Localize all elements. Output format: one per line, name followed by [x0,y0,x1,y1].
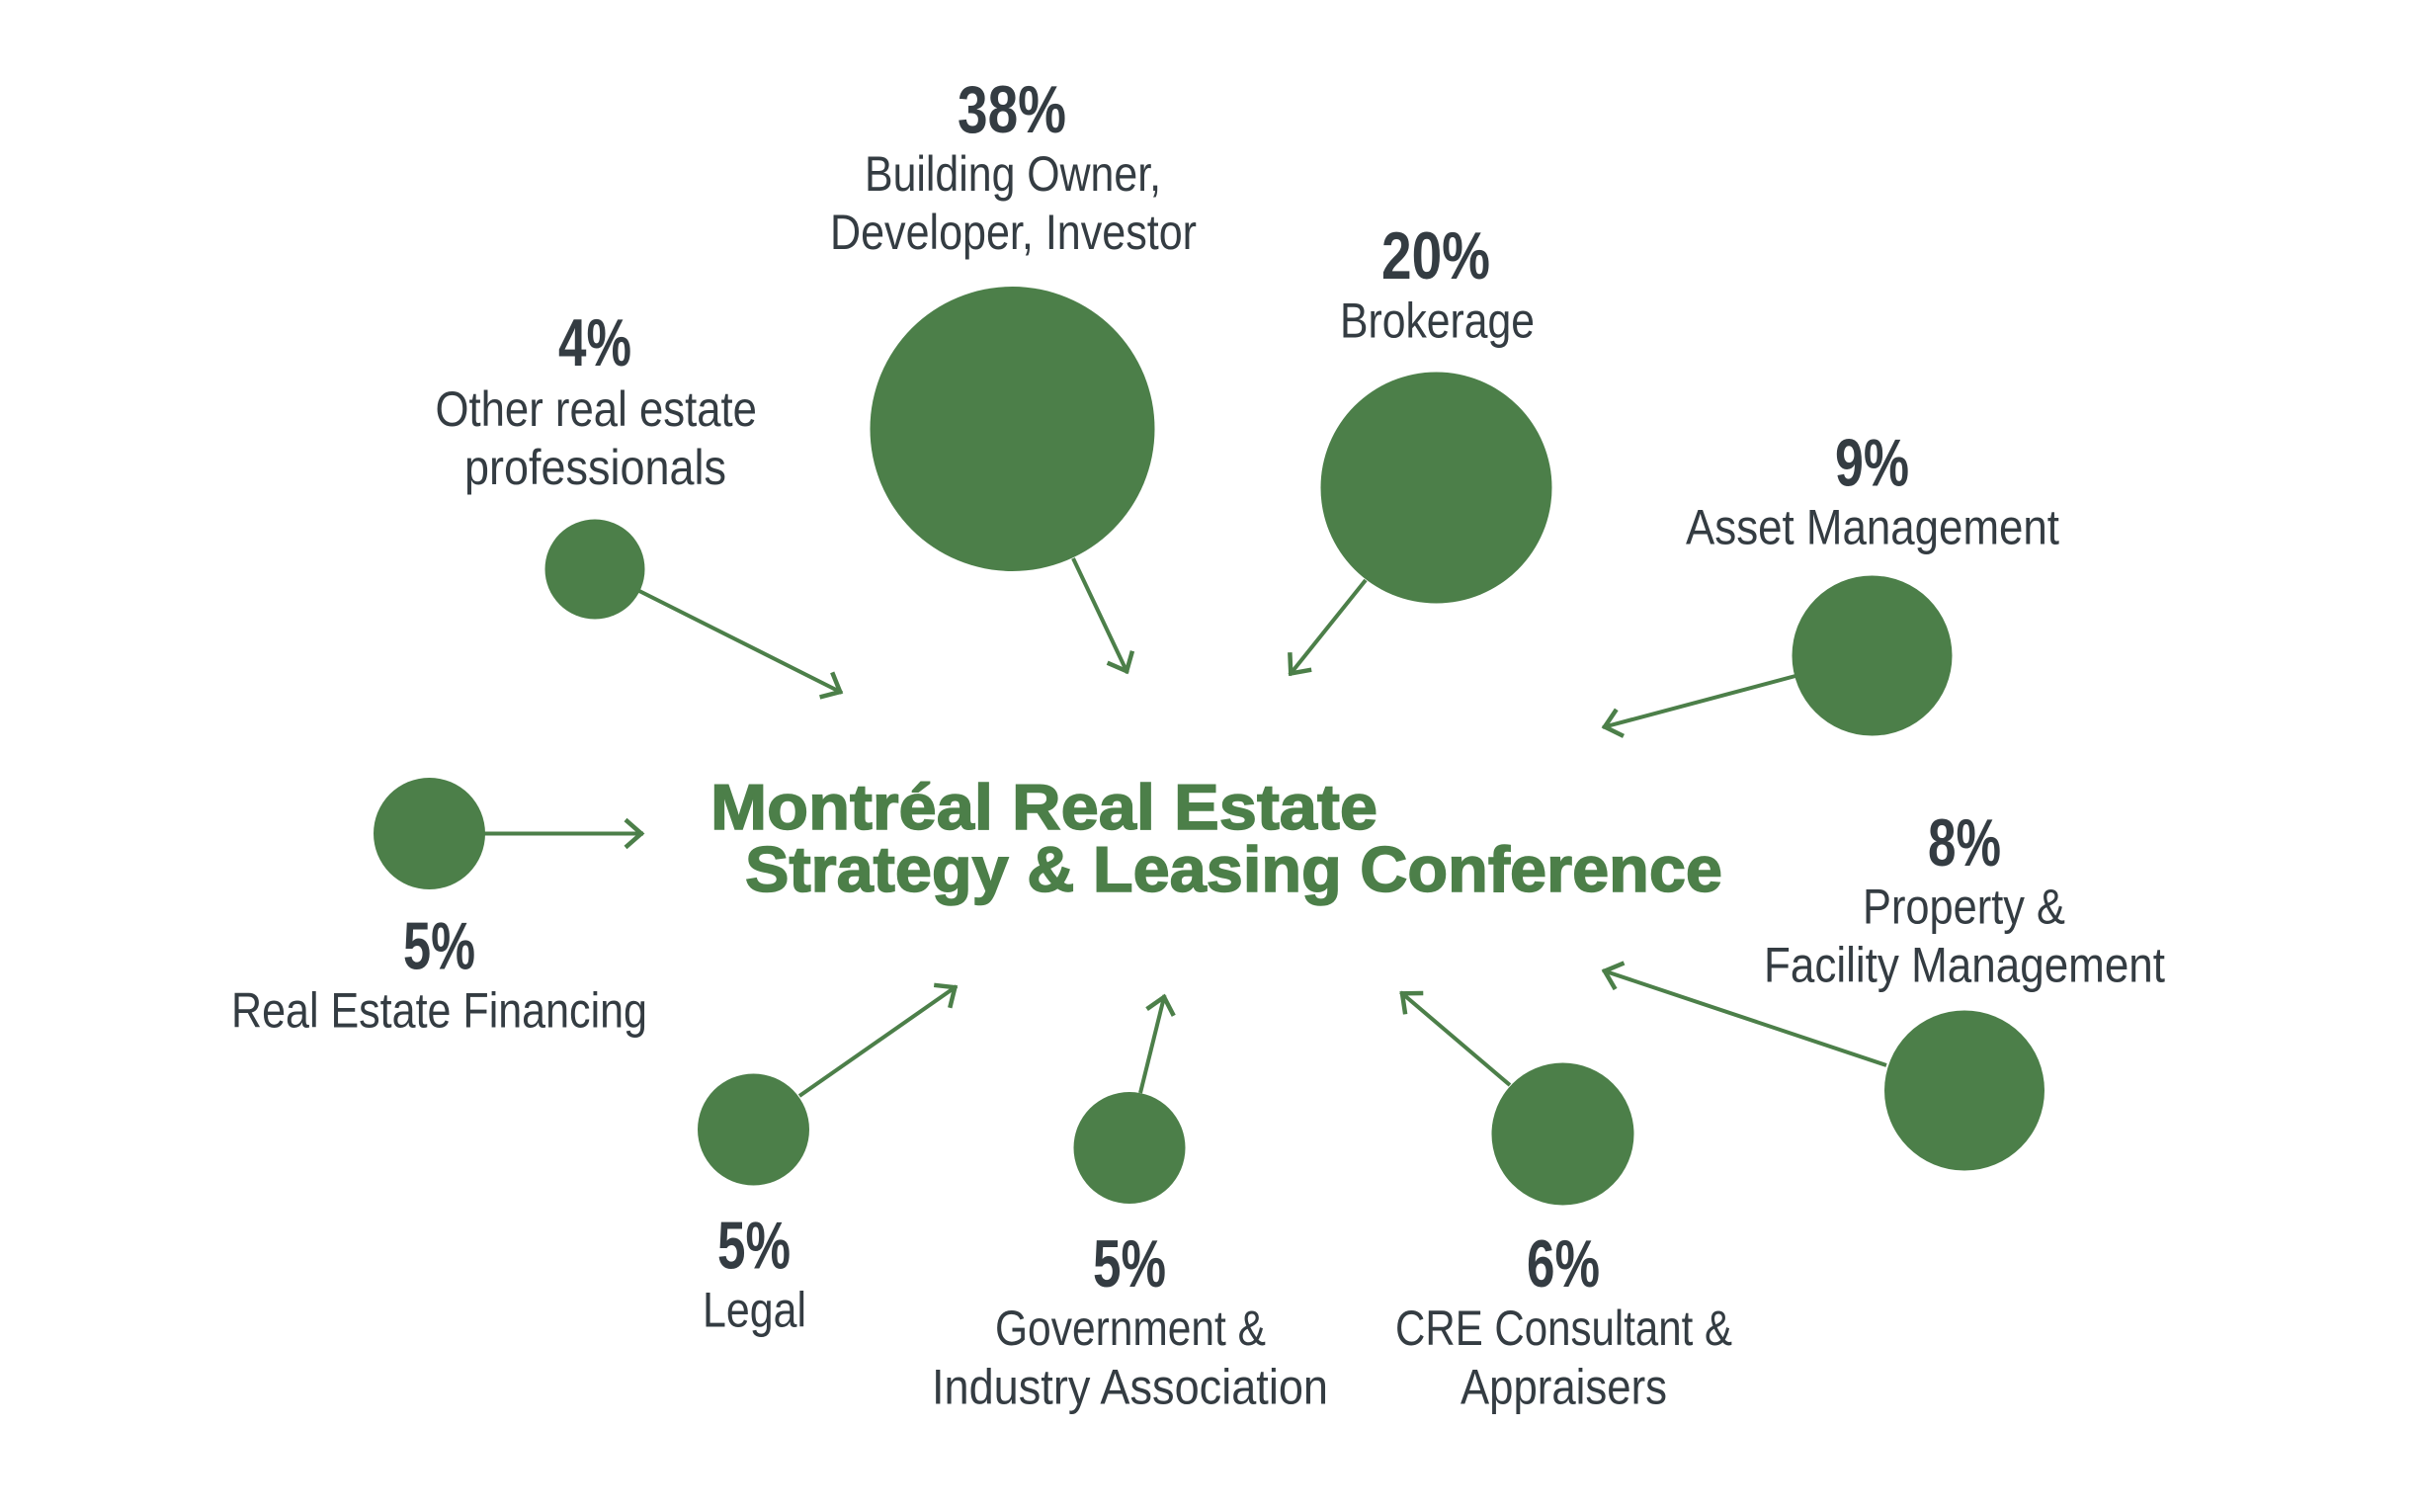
circle [870,287,1154,571]
title [710,771,1722,905]
label: Developer, Investor [830,205,1197,260]
segment: property and facility management 8% [1603,805,2165,1170]
label: 4% [558,305,631,380]
circle [1073,1092,1186,1204]
label: Facility Management [1764,937,2165,992]
label: Property & [1863,880,2065,935]
circle [545,520,644,619]
label: 20% [1381,218,1490,294]
segment: asset management 9% [1603,425,2059,735]
label: 38% [958,72,1066,147]
segment: real estate financing 5% [231,778,647,1038]
arrow [1073,558,1127,673]
label: 5% [1093,1226,1166,1302]
circle [1320,372,1551,603]
arrow [639,591,842,693]
arrow [1401,992,1510,1085]
arrow [1140,995,1164,1093]
label: Asset Management [1686,500,2059,555]
label: 5% [403,909,475,984]
circle [698,1073,809,1186]
label: Legal [703,1283,806,1338]
label: 9% [1835,425,1909,500]
circle [1492,1063,1634,1206]
label: Brokerage [1340,293,1535,348]
segment: legal 5% [698,986,957,1338]
arrow [1290,580,1366,675]
label: Government & [995,1301,1266,1356]
label [932,1226,1328,1415]
circle [1884,1010,2044,1170]
label [231,909,647,1038]
label: Real Estate Financing [231,982,647,1038]
arrow [1603,970,1886,1065]
label [435,305,757,495]
circle [1793,575,1953,735]
arrow [484,832,643,836]
label [830,72,1197,260]
label [1686,425,2059,555]
label [1340,218,1535,348]
label: Appraisers [1460,1360,1667,1415]
title: Strategy & Leasing Conference [745,833,1722,905]
label [1764,805,2165,992]
label: Industry Association [932,1360,1328,1415]
label [703,1208,806,1338]
label: Other real estate [435,381,757,437]
segment: building owner 38% [830,72,1197,673]
label: 6% [1527,1226,1600,1302]
label: 8% [1928,805,2001,881]
label: professionals [464,440,726,495]
circle [374,778,485,889]
label: Building Owner, [865,146,1161,202]
segment: brokerage 20% [1290,218,1551,675]
segment: other real estate professionals 4% [435,305,842,693]
segment: government and industry association 5% [932,995,1328,1415]
title: Montréal Real Estate [710,771,1377,843]
segment: CRE consultant and appraisers 6% [1395,992,1732,1415]
label [1395,1226,1732,1415]
label: CRE Consultant & [1395,1301,1732,1356]
arrow [1603,676,1795,727]
arrow [799,986,957,1096]
label: 5% [717,1208,791,1283]
